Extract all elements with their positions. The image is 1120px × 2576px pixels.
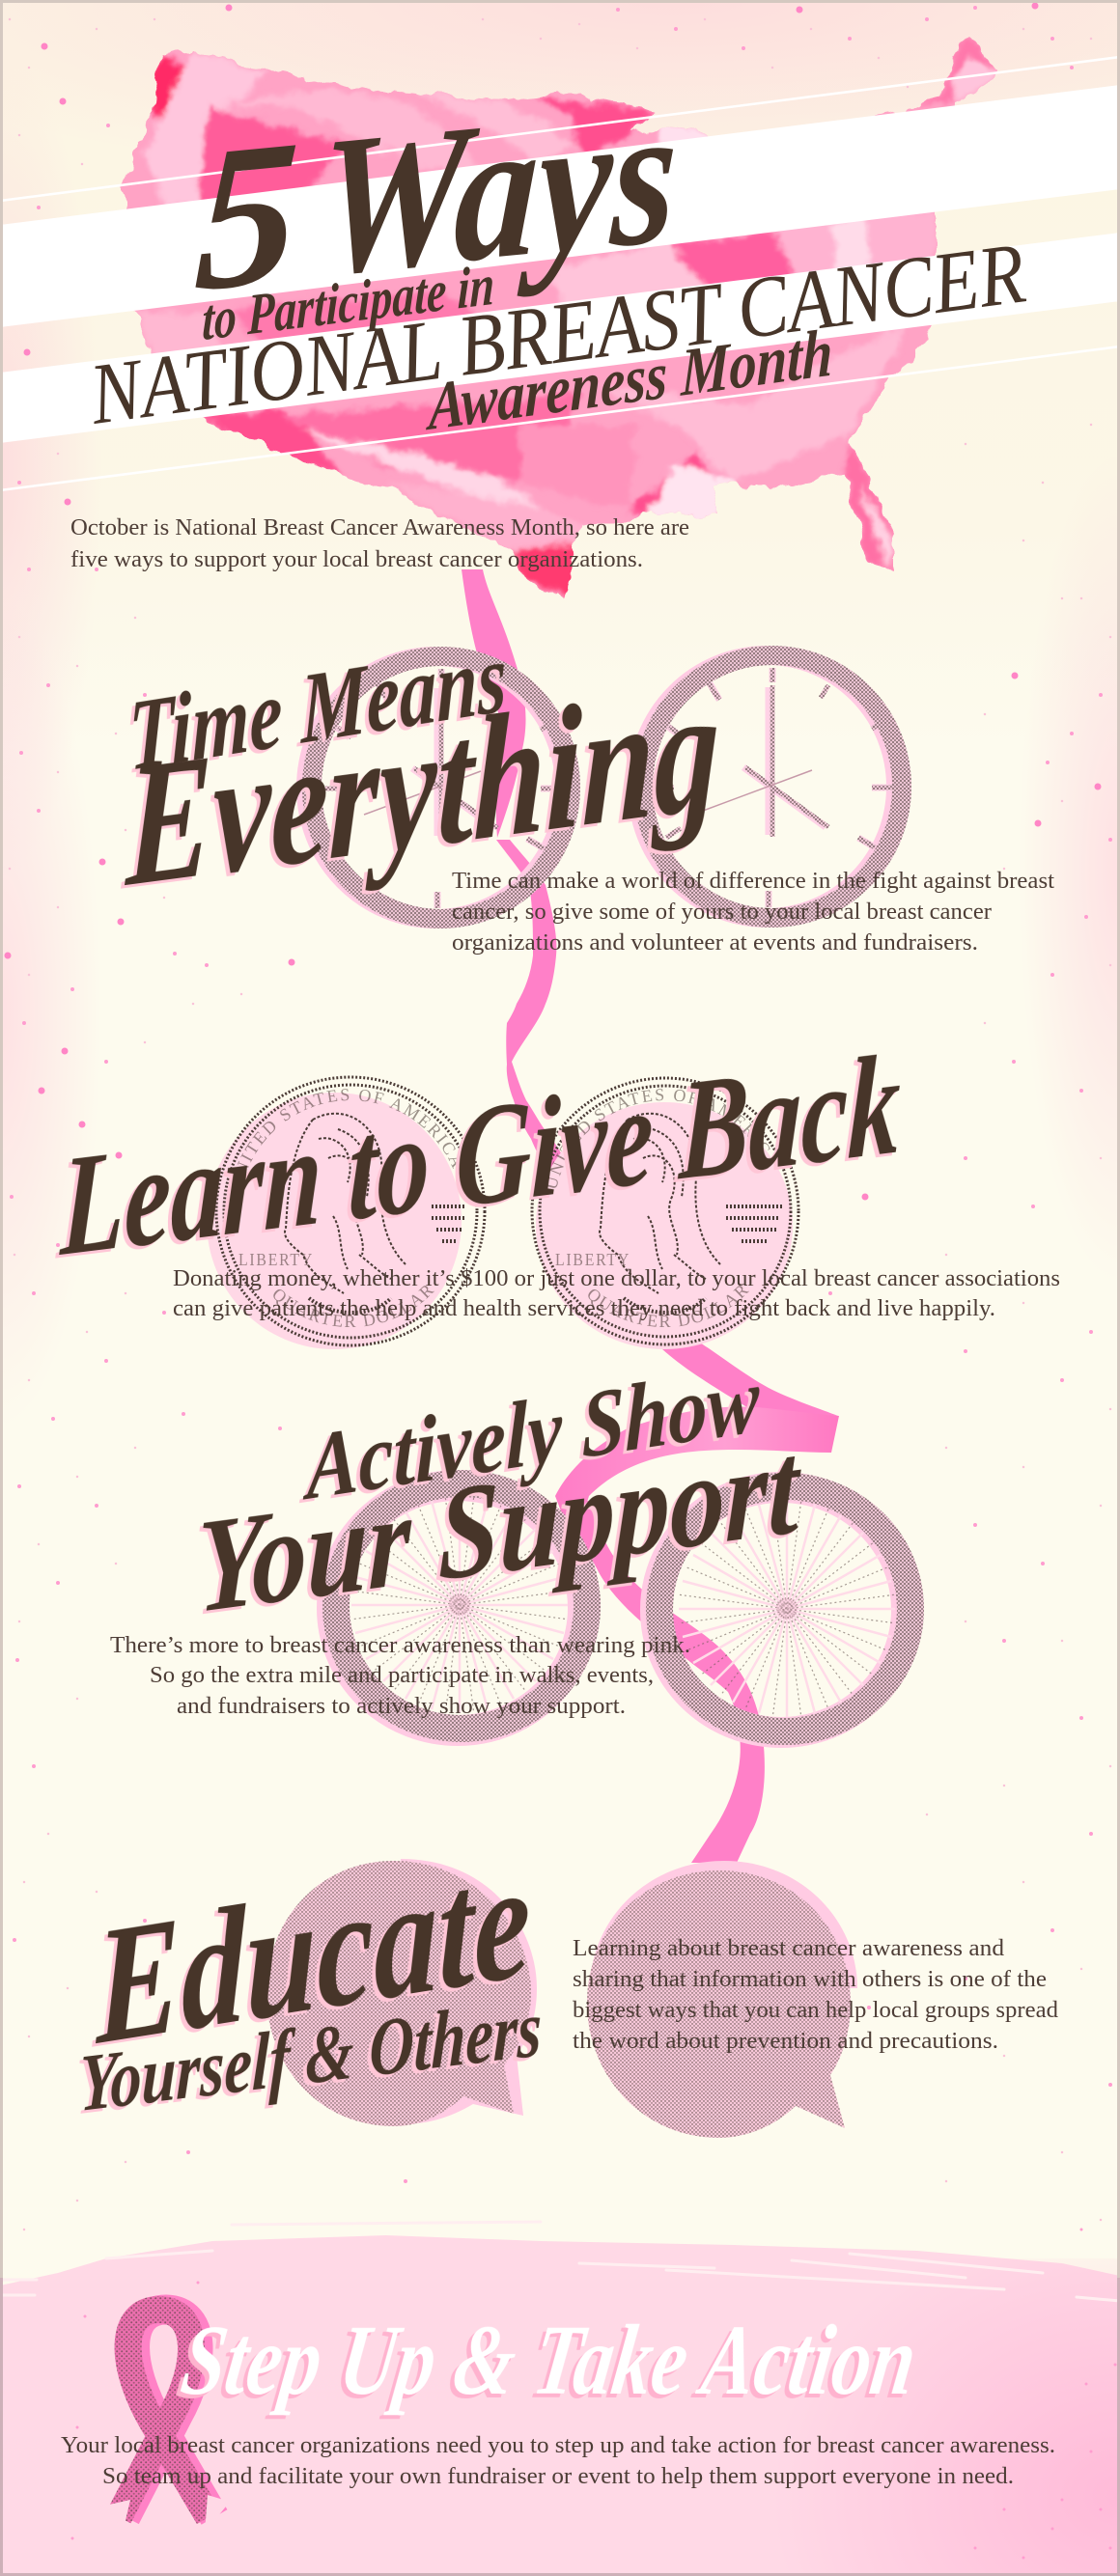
body text	[61, 2433, 1055, 2489]
icon: quarter coin left	[209, 1075, 487, 1349]
icon: speech bubble right	[587, 1861, 857, 2138]
intro text: five ways to support your local breast cancer organizations.	[70, 547, 643, 572]
body text	[452, 869, 1054, 956]
coin inscription: QUARTER DOLLAR	[588, 1286, 749, 1327]
heading: Your Support: Your Support	[197, 1411, 801, 1641]
brush-stroke pink panel	[0, 2222, 1120, 2576]
body text: Learning about breast cancer awareness and	[573, 1936, 1004, 1961]
heading: Everything: Everything	[124, 649, 720, 924]
pink ribbon: lower wave	[496, 840, 838, 1416]
body text: organizations and volunteer at events and fundraisers.	[452, 930, 978, 956]
title	[84, 62, 1030, 446]
body text: and fundraisers to actively show your support.	[177, 1694, 626, 1719]
intro text: October is National Breast Cancer Awareness Month, so here are	[70, 515, 689, 540]
coin inscription: QUARTER DOLLAR	[273, 1286, 434, 1327]
heading: Educate: Educate	[93, 1826, 532, 2080]
body text: Donating money, whether it’s $100 or just one dollar, to your local breast cancer associations	[173, 1266, 1060, 1291]
body text: So team up and facilitate your own fundraiser or event to help them support everyone in need.	[102, 2464, 1014, 2489]
icon: bicycle wheel right	[656, 1486, 910, 1732]
pink ribbon: bottom segment	[560, 1501, 765, 1863]
body text: So go the extra mile and participate in walks, events,	[150, 1663, 654, 1688]
body text	[173, 1266, 1060, 1321]
map of the USA filled with pink ribbons	[116, 29, 1014, 608]
intro text	[70, 515, 689, 572]
section 1: time means everything	[124, 621, 1054, 956]
title: to Participate in: to Participate in	[202, 253, 495, 353]
coin inscription: LIBERTY	[555, 1250, 630, 1269]
heading: Time Means: Time Means	[127, 621, 508, 792]
white title bands	[0, 57, 1120, 490]
body text: can give patients the help and health services they need to fight back and live happily.	[173, 1296, 995, 1321]
heading: Actively Show: Actively Show	[301, 1346, 761, 1521]
section 3: actively show your support	[110, 1346, 910, 1732]
coin inscription: LIBERTY	[238, 1250, 314, 1269]
body text: biggest ways that you can help local groups spread	[573, 1998, 1058, 2023]
icon: speech bubble left	[266, 1859, 537, 2126]
title: Awareness Month: Awareness Month	[426, 315, 833, 446]
title: 5 Ways: 5	[191, 97, 303, 335]
body text: sharing that information with others is one of the	[573, 1967, 1047, 1992]
heading: Step Up & Take Action: Step Up & Take Action	[176, 2304, 923, 2416]
section 2: learn to give back	[55, 1024, 1060, 1349]
body text: the word about prevention and precautions.	[573, 2029, 998, 2054]
coin inscription: UNITED STATES OF AMERICA	[238, 1089, 457, 1173]
body text: Time can make a world of difference in the fight against breast	[452, 869, 1054, 894]
body text: cancer, so give some of yours to your local breast cancer	[452, 900, 992, 925]
icon: clock right	[637, 655, 902, 918]
icon: bicycle wheel left	[332, 1483, 587, 1731]
coin inscription: UNITED STATES OF AMERICA	[548, 1089, 770, 1188]
pink ribbon: top segment	[462, 569, 526, 838]
icon: clock left	[306, 656, 571, 919]
icon: awareness ribbon	[100, 2310, 230, 2533]
body text: Your local breast cancer organizations need you to step up and take action for breast cancer awareness.	[61, 2433, 1055, 2458]
panel: step up and take action	[0, 2222, 1120, 2576]
heading: Yourself & Others: Yourself & Others	[79, 1983, 543, 2129]
title: 5 Ways	[191, 62, 682, 335]
pink ribbon: fold	[555, 1406, 839, 1544]
body text	[573, 1936, 1058, 2054]
title: 5 Ways: Ways	[315, 62, 682, 318]
body text	[110, 1633, 690, 1719]
section 4: educate yourself and others	[79, 1826, 1058, 2138]
body text: There’s more to breast cancer awareness than wearing pink.	[110, 1633, 690, 1658]
icon: quarter coin right	[531, 1077, 799, 1349]
